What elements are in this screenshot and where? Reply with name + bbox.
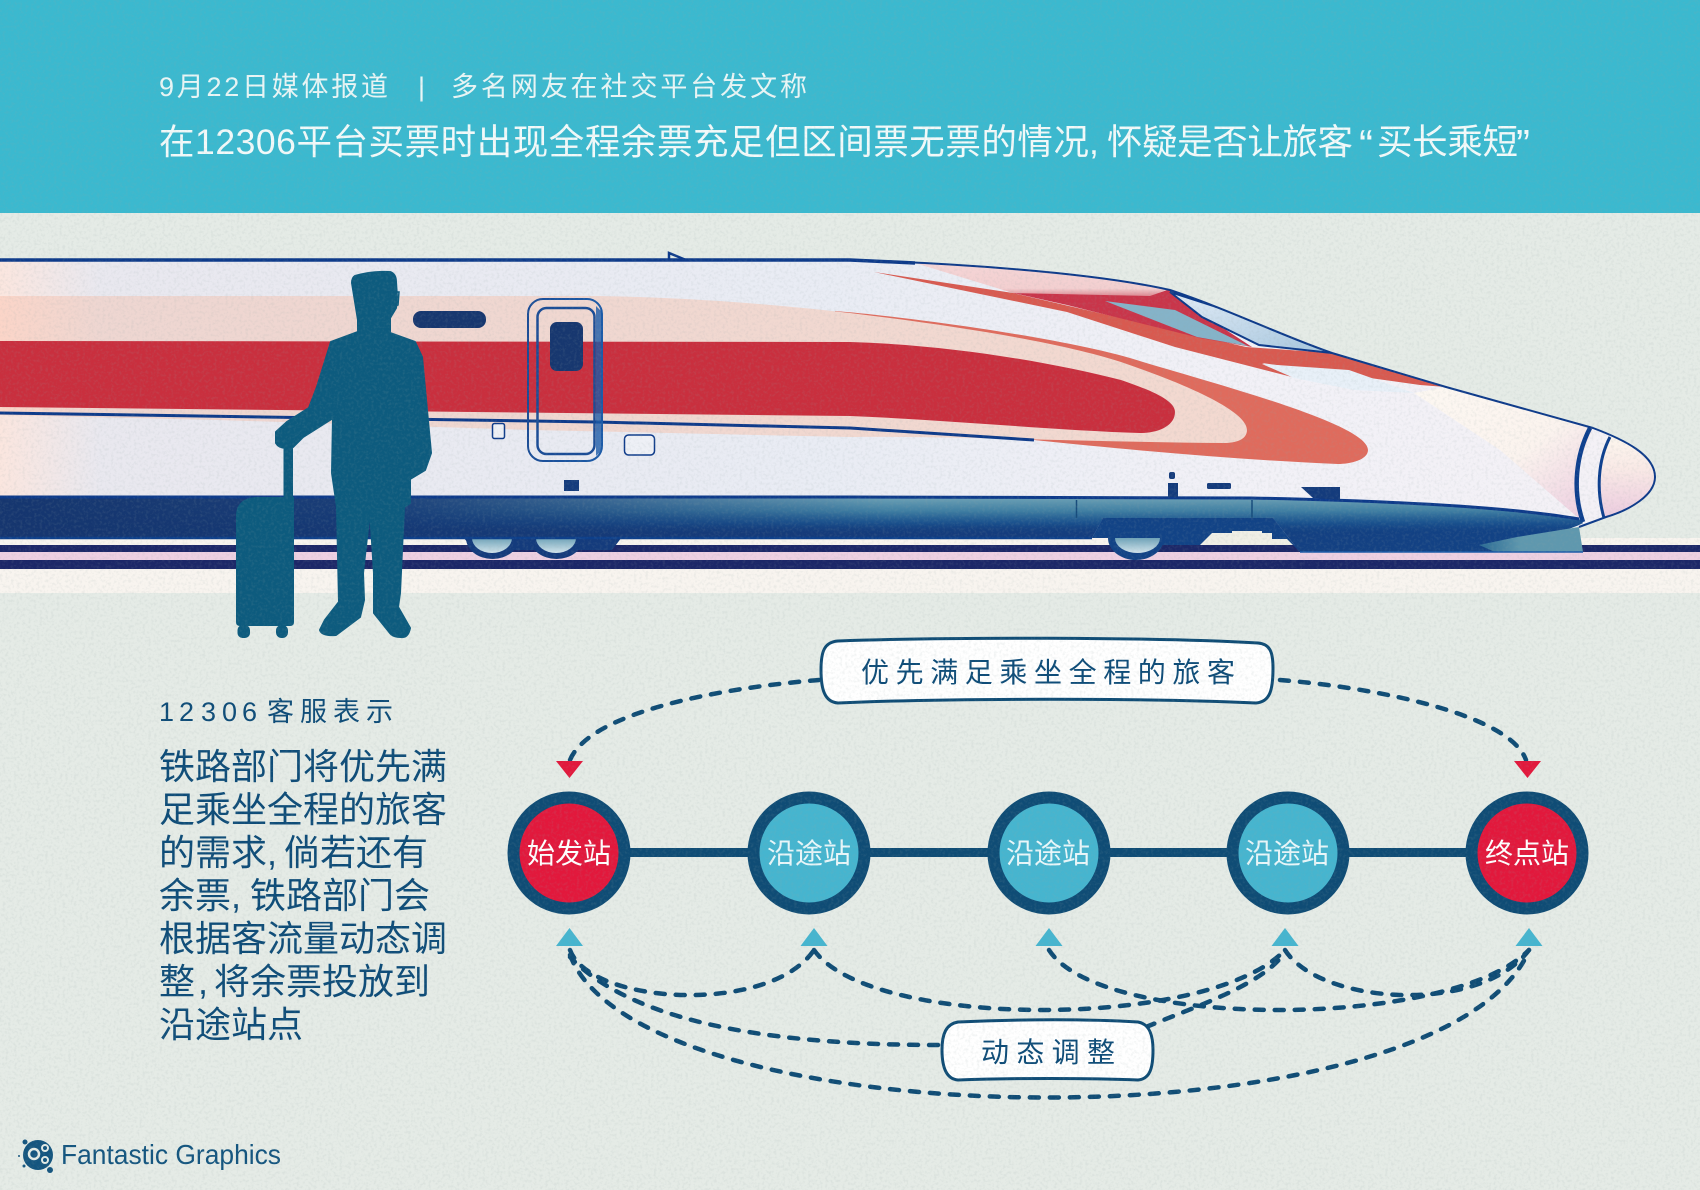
statement paragraph: 沿途站点	[159, 1004, 303, 1045]
coral swoosh	[835, 311, 1368, 464]
roof and nose outline	[0, 260, 1655, 527]
pale stripe	[0, 296, 1247, 443]
roof pink panel	[915, 263, 1170, 297]
teal up arrows	[556, 928, 1542, 946]
red down arrows	[556, 761, 1541, 778]
header headline text: 怀疑是否让旅客	[1107, 122, 1353, 162]
platform and rails	[0, 538, 1700, 593]
roof vent window	[413, 311, 486, 328]
cab coral stripe	[874, 272, 1446, 387]
windshield	[1170, 292, 1332, 353]
logo icon	[18, 1140, 53, 1173]
logo wordmark: Fantastic Graphics	[61, 1139, 281, 1170]
top dashed arcs	[570, 680, 1526, 760]
header kicker text: 多名网友在社交平台发文称	[451, 72, 807, 102]
statement paragraph: 足乘坐全程的旅客	[159, 789, 447, 830]
station: midway 1: 沿途站	[767, 838, 851, 869]
passenger silhouette with suitcase	[236, 272, 431, 638]
station: origin: 始发站	[527, 838, 611, 869]
station: midway 3	[1232, 798, 1344, 908]
top callout	[821, 638, 1273, 703]
header headline text: 买长乘短	[1377, 122, 1518, 162]
station: midway 2	[994, 798, 1104, 908]
train body	[0, 260, 1655, 527]
statement paragraph: 根据客流量动态调	[159, 918, 447, 959]
header headline text: ,	[1089, 122, 1099, 162]
intro label: 12306客服表示	[159, 697, 393, 727]
top callout: 优先满足乘坐全程的旅客	[861, 657, 1235, 688]
bottom dashed arcs	[570, 950, 1529, 1098]
bottom callout: 动态调整	[981, 1037, 1115, 1068]
station: midway 1	[754, 798, 864, 908]
rear wheels and bogie	[463, 537, 622, 559]
man	[276, 272, 431, 637]
nose shading	[1414, 387, 1593, 522]
cab red panel	[1013, 289, 1252, 347]
blue waist line	[0, 413, 1034, 440]
header kicker text: |	[418, 72, 425, 102]
header band	[0, 0, 1700, 213]
nose cap	[1600, 438, 1654, 516]
glasses	[396, 292, 399, 306]
roof antenna	[669, 253, 686, 260]
headlight reflection	[1262, 364, 1414, 393]
underbody	[0, 497, 1583, 560]
suitcase	[236, 443, 294, 638]
statement paragraph	[159, 746, 447, 1045]
train door	[528, 299, 602, 461]
statement paragraph: 的需求,倘若还有	[159, 832, 428, 873]
nose rings	[1577, 428, 1610, 522]
station: midway 2: 沿途站	[1006, 838, 1090, 869]
header headline text: 在12306平台买票时出现全程余票充足但区间票无票的情况	[159, 122, 1089, 162]
station: terminal: 终点站	[1485, 838, 1569, 869]
bottom callout	[942, 1020, 1153, 1080]
body livery	[0, 263, 1660, 522]
station: midway 3: 沿途站	[1245, 838, 1329, 869]
header headline text: “	[1359, 121, 1373, 168]
station: terminal	[1472, 798, 1582, 908]
header kicker text	[159, 72, 807, 102]
side window	[1105, 301, 1248, 346]
high speed train	[0, 253, 1660, 560]
line connector	[569, 848, 1527, 857]
statement paragraph: 余票,铁路部门会	[159, 875, 430, 916]
station: origin	[514, 798, 624, 908]
route diagram	[514, 638, 1582, 1098]
red stripe	[0, 341, 1175, 433]
statement paragraph: 铁路部门将优先满	[159, 746, 447, 787]
small hatches	[492, 424, 1340, 500]
header headline text	[159, 121, 1530, 168]
statement paragraph: 整,将余票投放到	[159, 961, 430, 1002]
footer logo	[18, 1139, 281, 1173]
header kicker text: 9月22日媒体报道	[159, 72, 388, 102]
header headline text: ”	[1516, 121, 1530, 168]
